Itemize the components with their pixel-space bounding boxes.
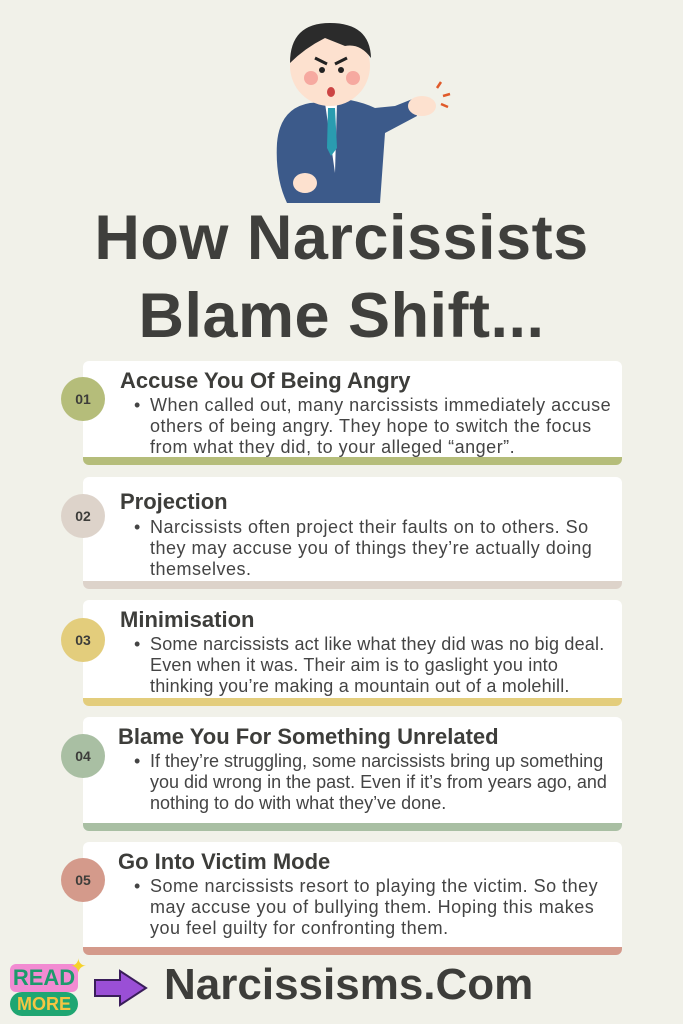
text 03: Even when it was. Their aim is to gaslight you into: [150, 655, 558, 675]
badge 04: 04: [75, 748, 91, 764]
panel: item 04: [83, 717, 622, 831]
badge 03: 03: [75, 632, 91, 648]
badge 01: [61, 377, 105, 421]
text 05: may accuse you of bullying them. Hoping this makes: [150, 897, 594, 917]
icon: read more badge: READ: [13, 965, 75, 990]
footer site name: Narcissisms.Com: [164, 960, 533, 1009]
heading 02: Projection: [120, 489, 228, 514]
text 01: from what they did, to your alleged “anger”.: [150, 437, 515, 457]
text 04: If they’re struggling, some narcissists bring up something: [150, 751, 603, 771]
panel: item 03: [83, 600, 622, 706]
badge 05: [61, 858, 105, 902]
badge 03: [61, 618, 105, 662]
badge 02: [61, 494, 105, 538]
heading 04: Blame You For Something Unrelated: [118, 724, 499, 749]
text 04: you did wrong in the past. Even if it’s from years ago, and: [150, 772, 607, 792]
title: Blame Shift...: [138, 281, 545, 351]
text 02: they may accuse you of things they’re actually doing: [150, 538, 592, 558]
badge 04: [61, 734, 105, 778]
text 03: Some narcissists act like what they did was no big deal.: [150, 634, 604, 654]
text 04: [150, 751, 607, 814]
title: [94, 203, 589, 351]
title: How Narcissists: [94, 203, 589, 273]
text 02: [150, 517, 592, 580]
panel: item 01: [83, 361, 622, 465]
icon: read more badge: [10, 956, 87, 1016]
badge 05: 05: [75, 872, 91, 888]
icon: angry businessman pointing: [276, 23, 450, 203]
panel: item 05: [83, 842, 622, 955]
icon: read more badge: MORE: [17, 994, 71, 1014]
heading 03: Minimisation: [120, 607, 254, 632]
text 01: When called out, many narcissists immediately accuse: [150, 395, 611, 415]
text 05: you feel guilty for confronting them.: [150, 918, 449, 938]
badge 01: 01: [75, 391, 91, 407]
arrow: [94, 969, 148, 1007]
text 02: themselves.: [150, 559, 252, 579]
text 03: [150, 634, 604, 697]
panel: item 02: [83, 477, 622, 589]
text 05: [150, 876, 598, 939]
text 05: Some narcissists resort to playing the victim. So they: [150, 876, 598, 896]
text 01: others of being angry. They hope to switch the focus: [150, 416, 592, 436]
badge 02: 02: [75, 508, 91, 524]
text 01: [150, 395, 611, 458]
icon: read more badge: ✦: [70, 956, 87, 978]
text 04: nothing to do with what they’ve done.: [150, 793, 446, 813]
text 03: thinking you’re making a mountain out of a molehill.: [150, 676, 570, 696]
text 02: Narcissists often project their faults on to others. So: [150, 517, 589, 537]
heading 05: Go Into Victim Mode: [118, 849, 330, 874]
heading 01: Accuse You Of Being Angry: [120, 368, 411, 393]
